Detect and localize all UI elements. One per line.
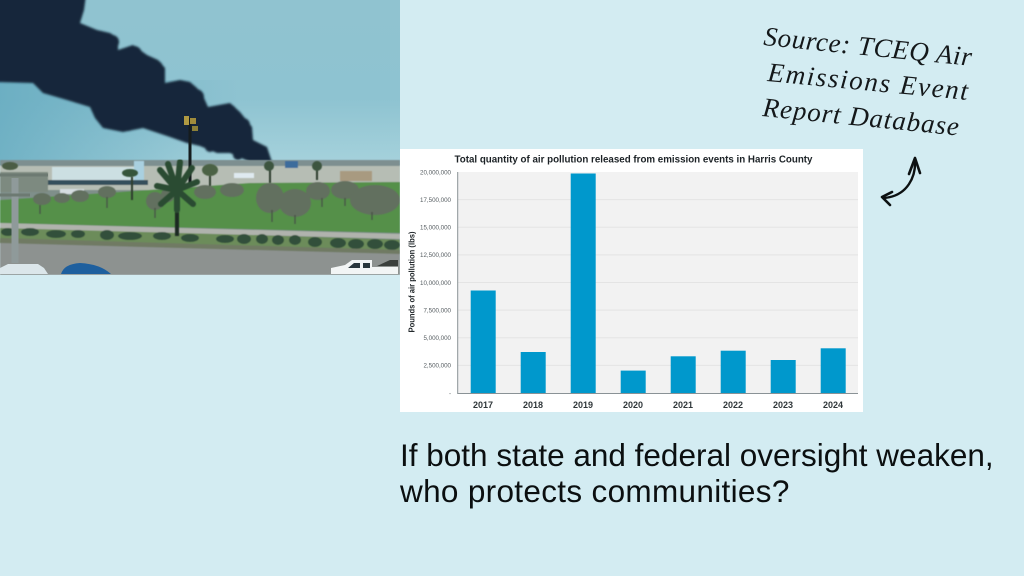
y axis labels: 10,000,000 — [420, 280, 452, 287]
palm trees — [2, 161, 322, 236]
x axis labels: 2021 — [673, 400, 693, 410]
handwritten source note: Report Database — [760, 92, 960, 142]
tree rows — [33, 181, 400, 217]
hedges — [1, 228, 400, 250]
highway — [0, 241, 400, 275]
headline question: If both state and federal oversight weaken, — [400, 437, 994, 473]
y axis labels: - — [449, 390, 451, 397]
ground — [0, 160, 400, 275]
y axis labels: 5,000,000 — [423, 335, 452, 342]
y axis labels — [420, 169, 452, 397]
y axis labels: 7,500,000 — [423, 307, 452, 314]
y axis labels: 17,500,000 — [420, 197, 452, 204]
vehicles — [0, 264, 48, 274]
double-headed curved arrow — [880, 156, 922, 206]
x axis labels: 2018 — [523, 400, 543, 410]
x axis labels: 2023 — [773, 400, 793, 410]
grass field — [0, 182, 400, 233]
y axis labels: 15,000,000 — [420, 225, 452, 232]
sign gantry pole — [12, 178, 18, 263]
handwritten source note: Source: TCEQ Air — [762, 21, 974, 72]
light pole — [188, 118, 192, 185]
y axis labels: 2,500,000 — [423, 363, 452, 370]
x axis labels: 2020 — [623, 400, 643, 410]
chart title: Total quantity of air pollution released from emission events in Harris County — [454, 154, 813, 166]
smoke plume — [0, 0, 272, 162]
bars — [471, 174, 846, 393]
handwritten source note — [760, 21, 974, 142]
photo: black smoke plume over industrial site — [0, 0, 400, 275]
frontage road — [0, 227, 400, 256]
y axis title: Pounds of air pollution (lbs) — [408, 231, 416, 332]
x axis labels — [473, 400, 843, 410]
y axis labels: 12,500,000 — [420, 252, 452, 259]
x axis labels: 2024 — [823, 400, 843, 410]
x axis labels: 2017 — [473, 400, 493, 410]
x axis labels: 2022 — [723, 400, 743, 410]
headline question — [400, 437, 994, 509]
distant buildings — [0, 166, 400, 190]
handwritten source note: Emissions Event — [765, 57, 971, 106]
y axis labels: 20,000,000 — [420, 169, 452, 176]
headline question: who protects communities? — [400, 473, 790, 509]
x axis labels: 2019 — [573, 400, 593, 410]
bar chart: total air pollution by year — [400, 149, 863, 412]
